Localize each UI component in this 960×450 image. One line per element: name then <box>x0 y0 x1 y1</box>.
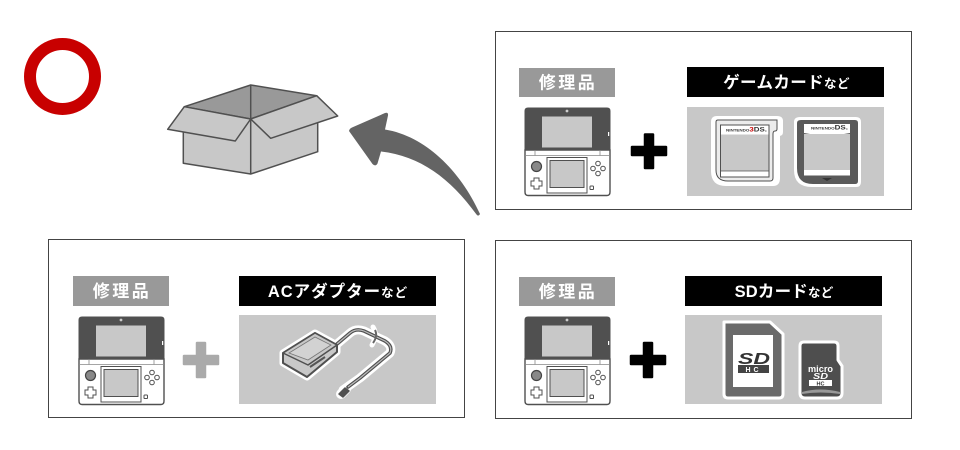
heading: SD card <box>685 276 882 306</box>
plug <box>339 388 349 397</box>
icon: open cardboard box <box>168 85 338 174</box>
arrow: from game card panel to box <box>349 113 480 216</box>
panel: SD card <box>496 240 912 418</box>
icon: handheld console <box>79 317 164 404</box>
adapter and cable white outline <box>283 327 391 394</box>
label: repair item: 修理品 <box>539 282 597 302</box>
icon: SDHC card: SD <box>738 351 771 368</box>
adapter body <box>283 333 337 377</box>
icon: DS game card: NINTENDO DS. <box>811 126 848 132</box>
label: repair item: 修理品 <box>539 74 597 92</box>
heading: game card <box>687 67 884 97</box>
icon: microSDHC card: SD <box>813 372 828 381</box>
icon: handheld console <box>525 317 610 404</box>
icon: handheld console <box>525 108 610 196</box>
icon: microSDHC card: micro <box>808 364 834 374</box>
label: repair item: 修理品 <box>93 282 151 301</box>
heading: AC adapter: ACアダプターなど <box>268 281 408 301</box>
label: repair item <box>519 277 615 306</box>
panel: game card <box>496 32 912 210</box>
icon: 3DS game card <box>712 117 782 185</box>
icon: microSDHC card <box>800 342 842 398</box>
icon: SDHC card: HC <box>745 367 762 374</box>
cable <box>337 330 391 387</box>
panel: AC adapter <box>48 240 464 418</box>
icon: microSDHC card: HC <box>817 382 824 388</box>
illustration: game cards <box>687 107 884 196</box>
icon: plus <box>631 343 665 377</box>
icon: 3DS game card: NINTENDO 3DS. <box>726 128 767 134</box>
icon: SDHC card <box>724 322 783 398</box>
cable tie <box>373 330 376 343</box>
illustration: memory cards <box>685 315 882 404</box>
icon: plus <box>632 134 666 168</box>
label: repair item <box>519 68 615 97</box>
heading: SD card: SDカードなど <box>735 282 834 301</box>
heading: AC adapter <box>239 276 436 306</box>
icon: DS game card <box>794 117 861 187</box>
icon: plus (gray) <box>184 343 218 377</box>
heading: game card: ゲームカードなど <box>723 73 850 92</box>
label: repair item <box>73 276 169 306</box>
illustration: AC adapter <box>239 315 436 404</box>
icon: red circle <box>30 44 95 109</box>
